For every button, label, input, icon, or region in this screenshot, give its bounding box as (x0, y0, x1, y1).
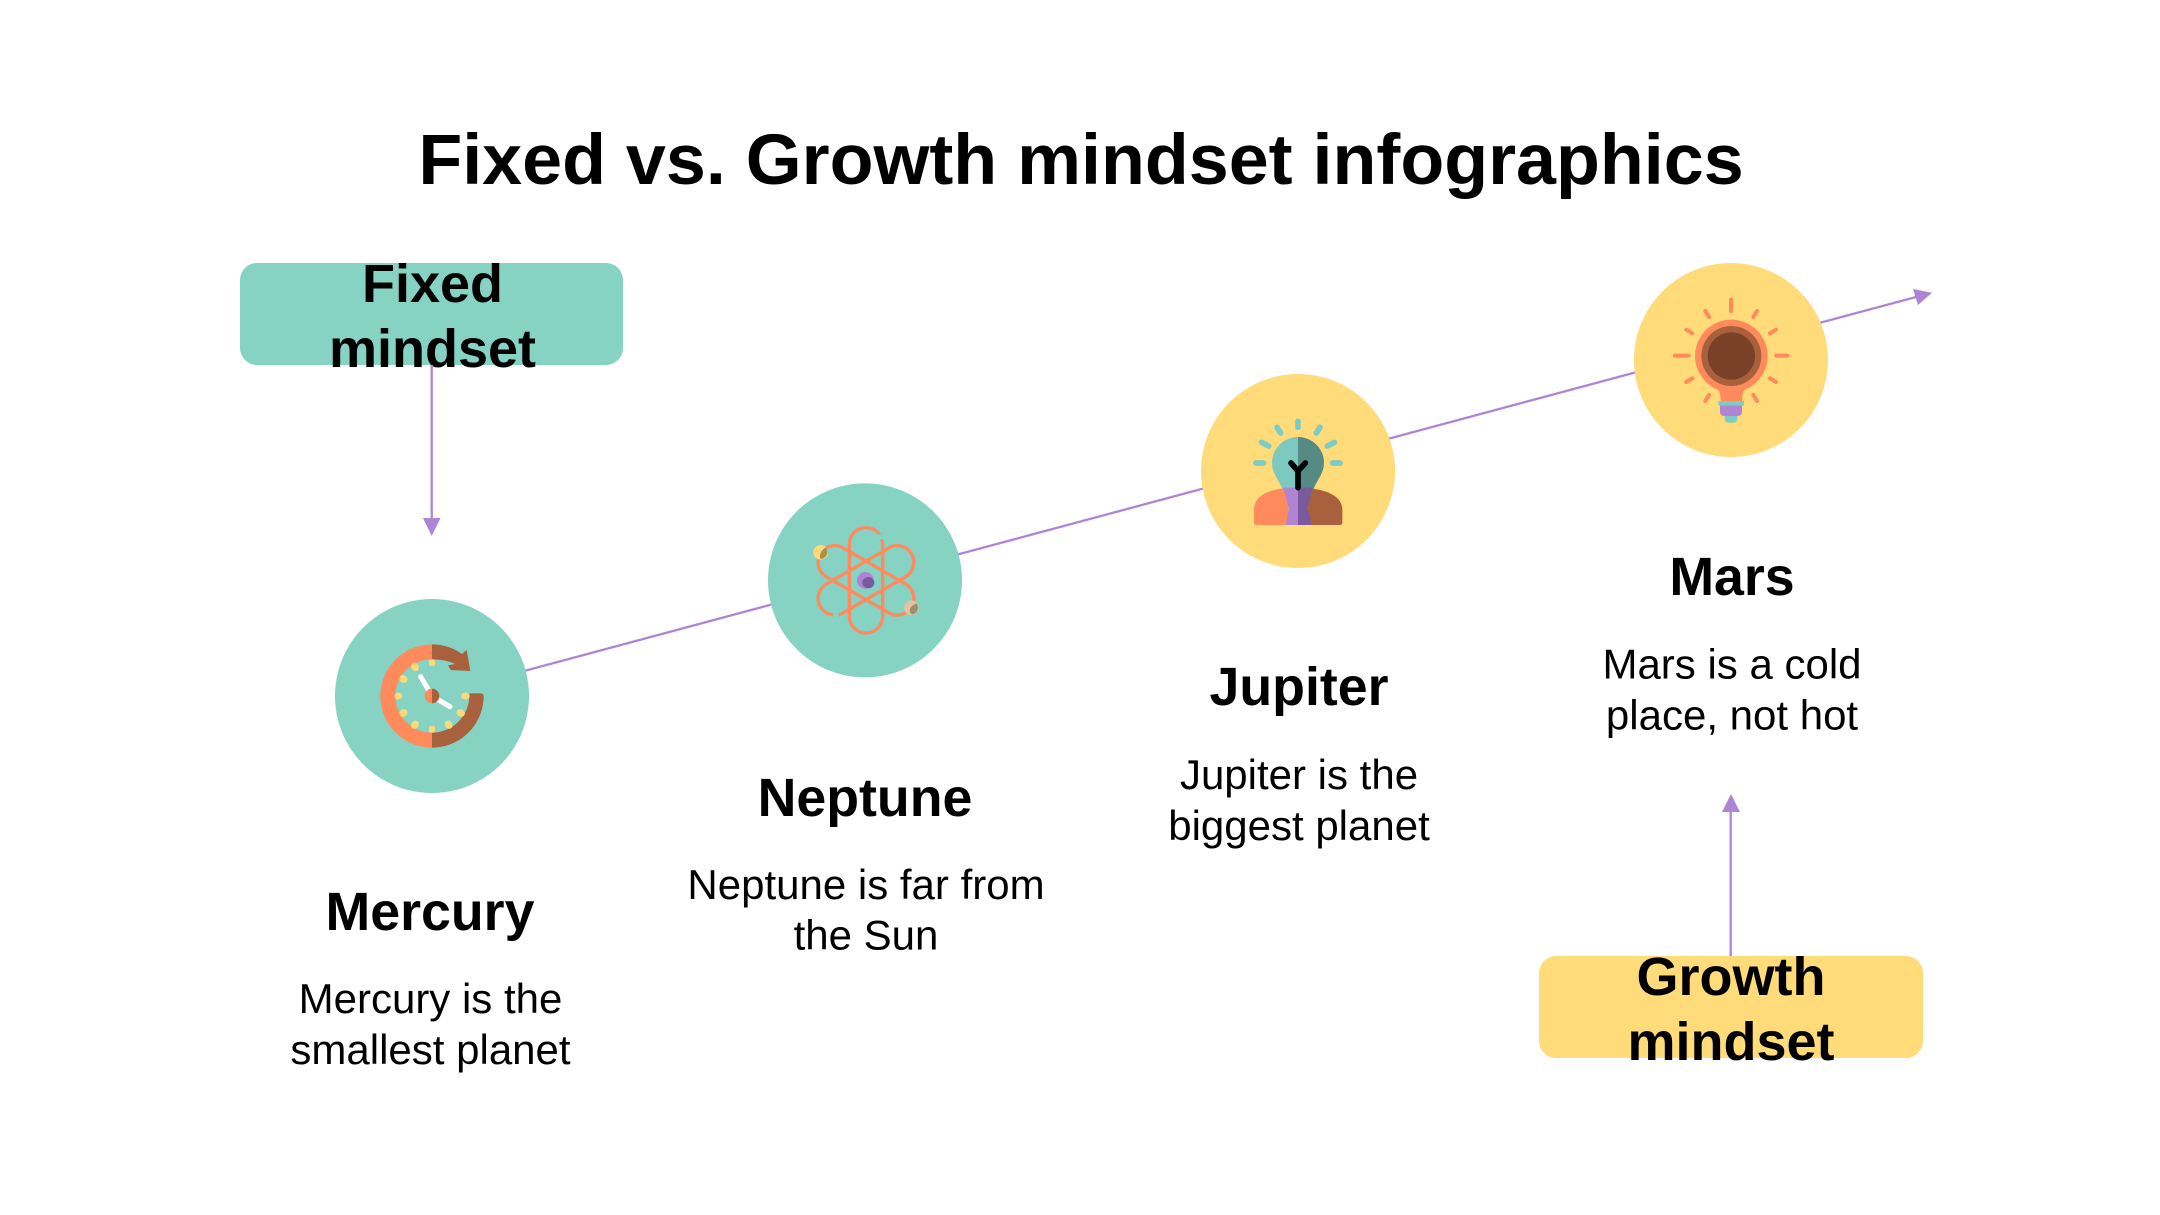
text block: Mercury (290, 882, 571, 1073)
text block: Jupiter (1168, 657, 1430, 849)
text block: Mercury: Mercury (326, 882, 535, 942)
arrow: progress line from fixed to growth (431, 289, 1932, 696)
text block: Neptune (687, 768, 1045, 958)
icon: Neptune atom badge (768, 483, 962, 677)
icon: Mercury clock badge (335, 599, 529, 793)
text block: Neptune: the Sun (794, 912, 938, 958)
text block: Neptune: Neptune (758, 768, 972, 828)
text block: Mars: place, not hot (1606, 692, 1858, 738)
panel: growth mindset label: mindset (1627, 1012, 1835, 1072)
text block: Jupiter: Jupiter is the (1180, 751, 1418, 798)
panel: growth mindset label (1539, 947, 1923, 1072)
text block: Mars: Mars is a cold (1602, 640, 1862, 688)
arrow: fixed mindset down to Mercury (423, 365, 440, 536)
panel: fixed mindset label: mindset (329, 319, 536, 379)
text block: Neptune: Neptune is far from (687, 861, 1045, 908)
title: Fixed vs. Growth mindset infographics (418, 120, 1744, 200)
text block: Mercury: smallest planet (290, 1026, 571, 1073)
arrow: growth mindset up to Mars (1722, 794, 1740, 956)
text block: Mars (1602, 547, 1862, 738)
panel: fixed mindset label (240, 254, 623, 379)
text block: Jupiter: Jupiter (1210, 657, 1389, 717)
panel: growth mindset label: Growth (1637, 947, 1825, 1007)
icon: Jupiter person with lightbulb badge (1201, 374, 1395, 568)
icon: Mars lightbulb badge (1634, 263, 1828, 457)
text block: Mars: Mars (1669, 547, 1795, 607)
text block: Jupiter: biggest planet (1168, 802, 1430, 849)
text block: Mercury: Mercury is the (299, 975, 562, 1022)
panel: fixed mindset label: Fixed (362, 254, 503, 314)
